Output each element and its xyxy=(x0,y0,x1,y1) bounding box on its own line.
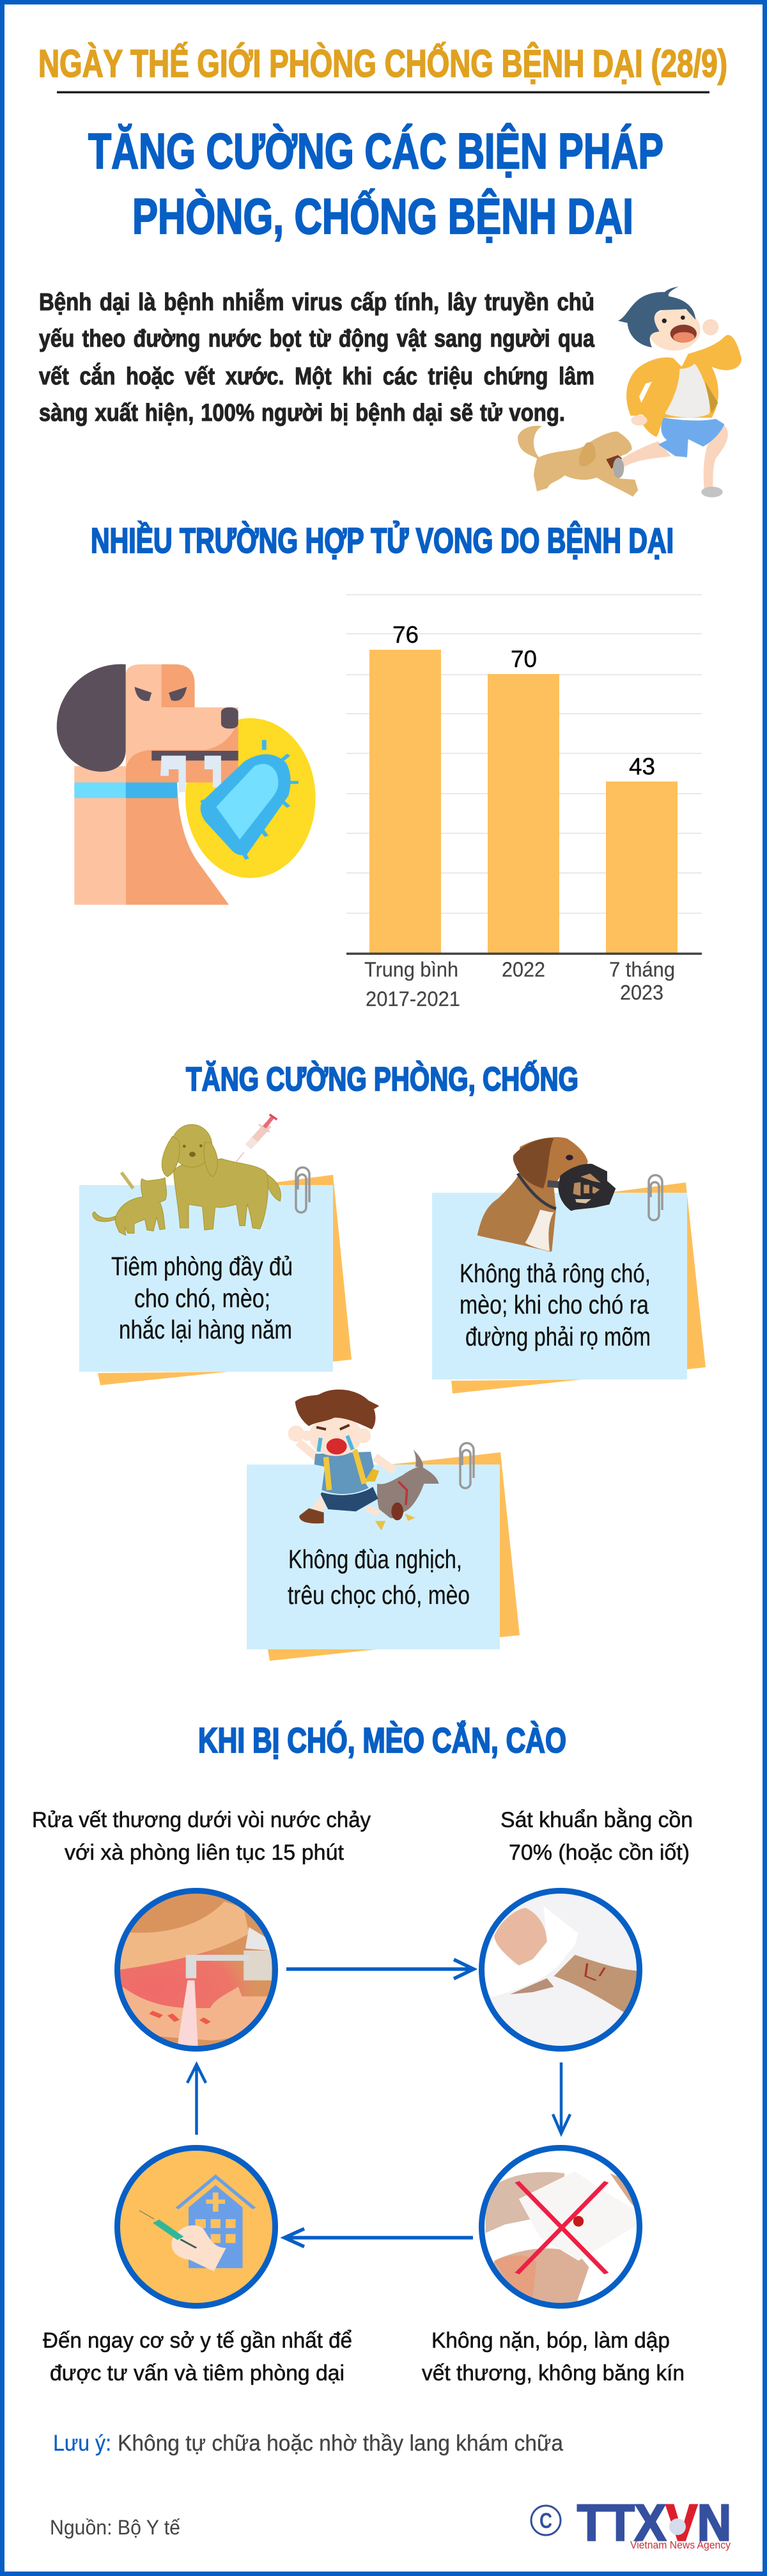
intro paragraph xyxy=(39,288,595,427)
bar chart: 76 xyxy=(392,622,419,648)
logo: TTXVN: TTXVN xyxy=(577,2494,731,2551)
panel: note muzzle: đường phải rọ mõm xyxy=(465,1322,651,1351)
note line: Không tự chữa hoặc nhờ thầy lang khám chữa xyxy=(118,2431,564,2456)
illustration: rabid dog with virus xyxy=(57,664,316,905)
step 2 circle: antiseptic xyxy=(477,1885,645,2055)
step 3 text: Không nặn, bóp, làm dập xyxy=(431,2329,670,2353)
section heading: when bitten: KHI BỊ CHÓ, MÈO CẮN, CÀO xyxy=(198,1720,566,1760)
intro paragraph: sàng xuất hiện, 100% người bị bệnh dại sẽ tử vong. xyxy=(39,400,565,427)
arrow: step 2 to step 3 xyxy=(553,2062,570,2133)
intro paragraph: yếu theo đường nước bọt từ động vật sang người qua xyxy=(39,326,595,352)
step 3 text: vết thương, không băng kín xyxy=(422,2361,685,2385)
logo: TTXVN: C xyxy=(539,2509,552,2533)
note line: Lưu ý: xyxy=(53,2431,111,2456)
bar chart: 70 xyxy=(511,646,537,672)
panel: note vaccinate: nhắc lại hàng năm xyxy=(119,1315,292,1344)
step 3 circle: do not squeeze xyxy=(477,2144,645,2314)
logo: TTXVN: Vietnam News Agency xyxy=(630,2539,731,2551)
arrow: step 1 to step 2 xyxy=(286,1959,474,1979)
panel: note vaccinate xyxy=(79,1115,352,1385)
step 1 text: với xà phòng liên tục 15 phút xyxy=(65,1841,345,1865)
arrow: step 3 to step 4 xyxy=(284,2229,473,2247)
illustration: dog and cat with syringe xyxy=(93,1115,281,1236)
panel: note no teasing: trêu chọc chó, mèo xyxy=(288,1580,470,1610)
illustration: boy and dog xyxy=(288,1390,439,1530)
bar chart: 2022 xyxy=(502,958,545,981)
intro paragraph: vết cắn hoặc vết xước. Một khi các triệu chứng lâm xyxy=(39,362,594,390)
illustration: muzzled dog xyxy=(477,1137,616,1252)
step 1 circle: washing wound xyxy=(114,1888,278,2052)
bar chart: 7 tháng xyxy=(609,958,675,981)
bar: 2022 xyxy=(488,674,559,954)
arrow: step 4 to step 1 xyxy=(187,2064,206,2135)
step 2 text xyxy=(500,1808,693,1865)
bar chart: Trung bình xyxy=(364,958,458,981)
panel: note vaccinate: cho chó, mèo; xyxy=(134,1284,270,1313)
main headline xyxy=(88,123,663,244)
panel: note muzzle xyxy=(432,1137,706,1394)
icon: paper clip xyxy=(460,1443,474,1488)
panel: note no teasing: Không đùa nghịch, xyxy=(288,1544,462,1574)
panel: note no teasing xyxy=(247,1390,520,1661)
main headline: PHÒNG, CHỐNG BỆNH DẠI xyxy=(132,188,633,244)
bar chart: 2017-2021 xyxy=(366,987,460,1010)
panel: note muzzle: mèo; khi cho chó ra xyxy=(460,1290,649,1319)
bar chart xyxy=(346,595,702,1010)
step 1 text xyxy=(32,1808,371,1865)
step 4 text: Đến ngay cơ sở y tế gần nhất để xyxy=(43,2329,352,2353)
step 2 text: Sát khuẩn bằng cồn xyxy=(500,1808,693,1832)
bar: average 2017-2021 xyxy=(369,650,441,954)
bar chart: 2023 xyxy=(620,981,663,1004)
illustration: boy chased by dog xyxy=(518,287,741,498)
source: Nguồn: Bộ Y tế xyxy=(50,2516,180,2539)
step 4 text: được tư vấn và tiêm phòng dại xyxy=(50,2361,345,2385)
step 4 circle: hospital and vaccine xyxy=(117,2148,275,2306)
step 3 text xyxy=(422,2329,685,2385)
icon: paper clip xyxy=(296,1168,309,1213)
bar chart: 43 xyxy=(629,753,655,780)
icon: paper clip xyxy=(649,1175,662,1220)
bar: 7 months 2023 xyxy=(606,781,678,954)
step 4 text xyxy=(43,2329,352,2385)
step 2 text: 70% (hoặc cồn iốt) xyxy=(509,1841,690,1865)
section heading: prevention: TĂNG CƯỜNG PHÒNG, CHỐNG xyxy=(186,1060,578,1098)
intro paragraph: Bệnh dại là bệnh nhiễm virus cấp tính, lây truyền chủ xyxy=(39,288,594,316)
panel: note vaccinate: Tiêm phòng đầy đủ xyxy=(111,1252,293,1281)
panel: note muzzle: Không thả rông chó, xyxy=(460,1259,651,1288)
step 1 text: Rửa vết thương dưới vòi nước chảy xyxy=(32,1808,371,1832)
